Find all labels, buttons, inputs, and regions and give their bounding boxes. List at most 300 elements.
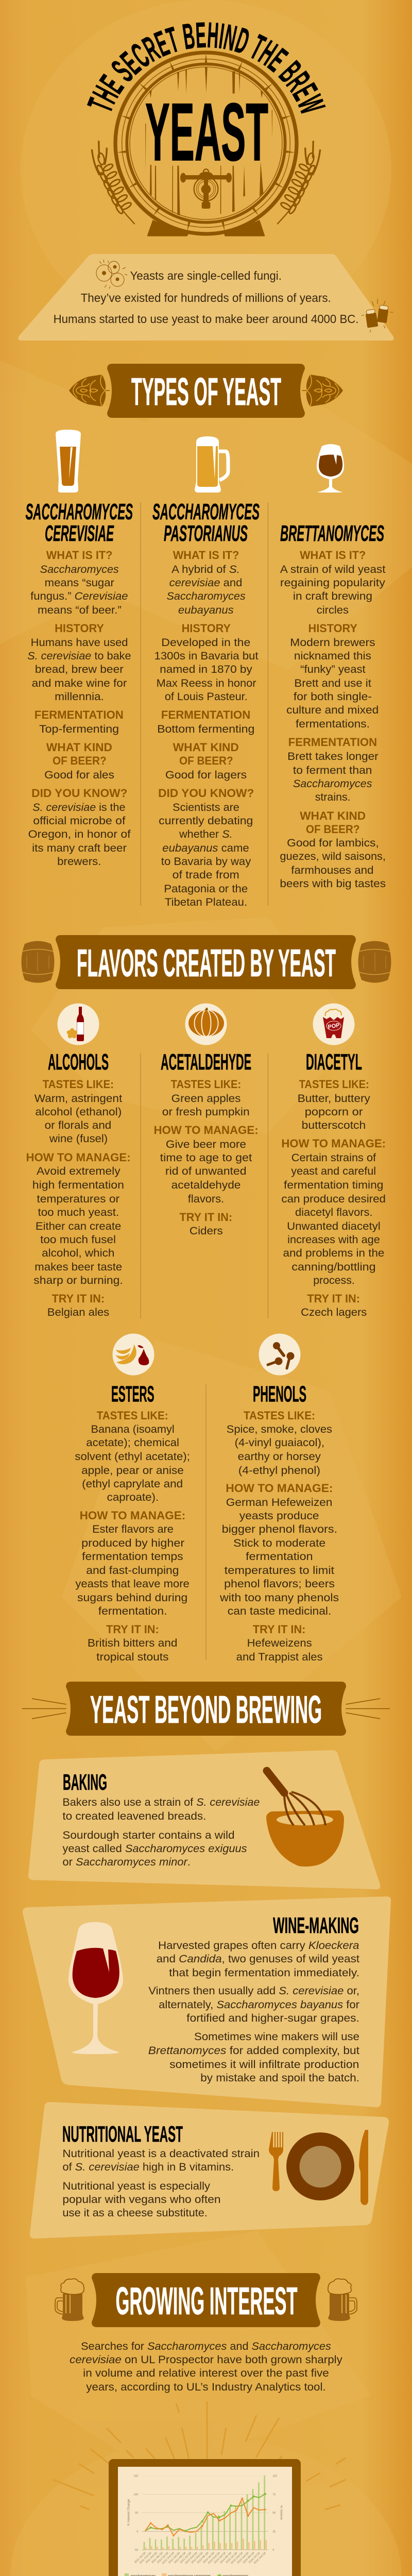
- chart: percent interest change and volume: 2015 3rd Qtr: [236, 2551, 250, 2565]
- text block: fermentation: FERMENTATION: [35, 708, 124, 721]
- text block: try it in: Belgian ales: [47, 1306, 109, 1318]
- icon: barrel with tap and wheat: [92, 53, 320, 236]
- text block: try it in: [179, 1211, 232, 1237]
- icon: wine bottle and flower: [58, 1004, 99, 1045]
- text block: what kind of beer: OF BEER?: [53, 754, 107, 767]
- icon: banana and pear: [112, 1333, 154, 1376]
- text block: history: bread, brew beer: [35, 663, 124, 675]
- text block: what is it: WHAT IS IT?: [46, 549, 112, 562]
- text block: history: Max Reess in honor: [157, 677, 256, 689]
- chart: percent interest change and volume: 2013 4th Qtr: [197, 2551, 210, 2564]
- column: saccharomyces pastorianus: [152, 499, 260, 908]
- text block: how to manage: fermentation temps: [82, 1550, 183, 1563]
- icon: left beer mug: [55, 2279, 84, 2321]
- text block: how to manage: and fast-clumping: [86, 1564, 179, 1577]
- text block: history: [27, 622, 131, 703]
- text block: nutritional yeast: popular with vegans who often: [62, 2193, 221, 2206]
- text block: history: HISTORY: [55, 622, 104, 635]
- text block: wine-making: by mistake and spoil the batch.: [200, 2072, 359, 2084]
- icon: right hop: [302, 375, 343, 406]
- text block: did you know: DID YOU KNOW?: [158, 787, 254, 800]
- text block: intro facts: Humans started to use yeast to make beer around 4000 BC.: [54, 312, 359, 326]
- text block: fermentation: Saccharomyces: [293, 777, 372, 790]
- text block: what is it: regaining popularity: [280, 577, 385, 589]
- column: saccharomyces cerevisiae: [26, 499, 133, 868]
- chart: percent interest change and volume: 50: [272, 2512, 276, 2515]
- icon: plate fork and knife: [269, 2130, 368, 2205]
- text block: intro facts: They’ve existed for hundreds of millions of years.: [81, 291, 331, 304]
- text block: history: fermentations.: [296, 718, 370, 730]
- text block: how to manage: [153, 1124, 259, 1205]
- text block: history: named in 1870 by: [160, 663, 252, 675]
- text block: what is it: [30, 549, 128, 616]
- text block: how to manage: [26, 1151, 131, 1286]
- text block: what is it: [167, 549, 246, 616]
- text block: tastes like: alcohol (ethanol): [35, 1106, 122, 1118]
- text block: tastes like: apple, pear or anise: [81, 1464, 184, 1477]
- text block: history: HISTORY: [308, 622, 357, 635]
- text block: history: 1300s in Bavaria but: [154, 650, 259, 662]
- chart: percent interest change and volume: 25: [272, 2530, 276, 2533]
- chart: percent interest change and volume: [125, 2475, 288, 2576]
- text block: tastes like: wine (fusel): [49, 1132, 108, 1145]
- text block: try it in: tropical stouts: [96, 1651, 169, 1663]
- heading: SACCHAROMYCES: [152, 499, 260, 524]
- text block: how to manage: German Hefeweizen: [226, 1496, 332, 1509]
- chart: percent interest change and volume: 2012 1st Qtr: [157, 2551, 169, 2564]
- text block: how to manage: rid of unwanted: [165, 1165, 247, 1177]
- text block: how to manage: bigger phenol flavors.: [222, 1523, 337, 1535]
- text block: did you know: Tibetan Plateau.: [165, 896, 247, 908]
- text block: wine-making: [148, 1939, 359, 2084]
- chart: percent interest change and volume: 2014 1st Qtr: [202, 2551, 215, 2564]
- text block: growing interest: Searches for Saccharomyces and Saccharomyces: [81, 2340, 331, 2352]
- text block: try it in: British bitters and: [88, 1637, 177, 1649]
- text block: try it in: and Trappist ales: [236, 1651, 323, 1663]
- text block: try it in: Czech lagers: [301, 1306, 367, 1318]
- text block: did you know: [158, 787, 254, 908]
- text block: fermentation: Top-fermenting: [39, 723, 119, 735]
- chart: percent interest change and volume: 50: [135, 2512, 138, 2515]
- text block: wine-making: that begin fermentation immediately.: [169, 1967, 359, 1979]
- heading: nutritional yeast: NUTRITIONAL YEAST: [62, 2122, 183, 2147]
- chart: percent interest change and volume: 100: [133, 2493, 138, 2496]
- text block: tastes like: TASTES LIKE:: [43, 1078, 114, 1091]
- text block: what kind of beer: farmhouses and: [291, 864, 374, 876]
- text block: what kind of beer: [44, 741, 114, 781]
- text block: how to manage: yeasts that leave more: [75, 1578, 190, 1590]
- text block: what kind of beer: beers with big tastes: [280, 877, 386, 890]
- text block: history: Modern brewers: [290, 636, 375, 649]
- text block: history: culture and mixed: [286, 704, 379, 716]
- column: alcohols: [26, 1049, 131, 1318]
- icon: left wheat: [92, 141, 135, 224]
- text block: how to manage: temperatures or: [37, 1193, 119, 1205]
- text block: how to manage: alcohol, which: [42, 1247, 114, 1259]
- text block: how to manage: [281, 1137, 386, 1286]
- text block: tastes like: (4-ethyl phenol): [238, 1464, 320, 1477]
- text block: what is it: [280, 549, 386, 616]
- text block: history: S. cerevisiae to bake: [27, 650, 131, 662]
- chart: percent interest change and volume: 2012 3rd Qtr: [168, 2551, 181, 2565]
- chart: percent interest change and volume: 2011 3rd Qtr: [145, 2551, 158, 2564]
- icon: cloves: [259, 1333, 301, 1376]
- text block: how to manage: yeast and careful: [291, 1165, 376, 1177]
- text block: tastes like: Banana (isoamyl: [91, 1423, 175, 1435]
- text block: what kind of beer: WHAT KIND: [173, 741, 239, 754]
- text block: how to manage: [219, 1482, 339, 1617]
- text block: what is it: eubayanus: [178, 604, 234, 616]
- text block: tastes like: [35, 1078, 122, 1145]
- text block: tastes like: earthy or horsey: [238, 1450, 321, 1463]
- text block: how to manage: flavors.: [188, 1193, 224, 1205]
- text block: history: “funky” yeast: [300, 663, 366, 675]
- icon: wine glass: [68, 1922, 123, 2054]
- text block: how to manage: [75, 1509, 190, 1617]
- text block: how to manage: HOW TO MANAGE:: [226, 1482, 333, 1495]
- text block: tastes like: (4-vinyl guaiacol),: [235, 1436, 324, 1449]
- chart: percent interest change and volume: % Volume: [279, 2505, 283, 2520]
- text block: history: Brett and use it: [294, 677, 371, 689]
- text block: try it in: [236, 1623, 323, 1663]
- text block: what is it: cerevisiae and: [169, 577, 242, 589]
- text block: how to manage: Certain strains of: [291, 1151, 376, 1164]
- text block: how to manage: high fermentation: [32, 1179, 124, 1191]
- text block: baking: or Saccharomyces minor.: [62, 1856, 191, 1868]
- text block: how to manage: diacetyl flavors.: [295, 1206, 373, 1218]
- text block: what kind of beer: OF BEER?: [306, 823, 359, 836]
- text block: how to manage: fermentation: [246, 1550, 313, 1563]
- text block: wine-making: Vintners then usually add S. cerevisiae or,: [148, 1985, 359, 1997]
- text block: what kind of beer: WHAT KIND: [46, 741, 112, 754]
- text block: nutritional yeast: of S. cerevisiae high in B vitamins.: [62, 2161, 234, 2173]
- text block: tastes like: [227, 1409, 332, 1477]
- heading: CEREVISIAE: [45, 521, 114, 546]
- text block: nutritional yeast: Nutritional yeast is a deactivated strain: [62, 2147, 260, 2160]
- text block: tastes like: butterscotch: [302, 1119, 366, 1131]
- header: barrel title graphic: YEAST: [145, 86, 268, 178]
- text block: tastes like: or florals and: [45, 1119, 111, 1131]
- chart: percent interest change and volume: 2015 2nd Qtr: [230, 2551, 244, 2565]
- icon: yeast cells: [96, 260, 127, 289]
- text block: did you know: whether S.: [179, 828, 233, 840]
- text block: how to manage: makes beer taste: [35, 1261, 122, 1273]
- text block: did you know: brewers.: [57, 855, 101, 868]
- section: types of yeast: [26, 364, 386, 908]
- text block: tastes like: acetate); chemical: [86, 1436, 179, 1449]
- chart: percent interest change and volume: % Interest Change: [127, 2499, 131, 2526]
- text block: nutritional yeast: Nutritional yeast is especially: [62, 2180, 210, 2192]
- banner: types of yeast: [107, 364, 305, 418]
- text block: tastes like: (ethyl caprylate and: [82, 1478, 183, 1490]
- text block: did you know: to Bavaria by way: [161, 855, 251, 868]
- section: growing interest: [53, 2273, 357, 2576]
- text block: baking: to created leavened breads.: [62, 1810, 206, 1822]
- text block: how to manage: canning/bottling: [291, 1261, 376, 1273]
- icon: left barrel: [22, 941, 55, 983]
- text block: how to manage: HOW TO MANAGE:: [153, 1124, 259, 1137]
- text block: how to manage: yeasts produce: [239, 1510, 319, 1522]
- text block: tastes like: TASTES LIKE:: [97, 1409, 168, 1422]
- text block: how to manage: acetaldehyde: [171, 1179, 241, 1191]
- header: barrel title graphic: [87, 22, 326, 236]
- text block: what is it: means “sugar: [45, 577, 114, 589]
- text block: tastes like: Spice, smoke, cloves: [227, 1423, 332, 1435]
- text block: tastes like: [298, 1078, 370, 1131]
- chart: percent interest change and volume: 0: [272, 2549, 274, 2552]
- text block: how to manage: phenol flavors; beers: [224, 1578, 335, 1590]
- text block: how to manage: can produce desired: [281, 1193, 386, 1205]
- banner: yeast beyond brewing: [22, 1682, 390, 1736]
- text block: try it in: TRY IT IN:: [106, 1623, 159, 1636]
- column: diacetyl: [281, 1049, 386, 1318]
- icon: left hop: [69, 375, 110, 406]
- text block: how to manage: Either can create: [36, 1220, 121, 1232]
- text block: intro facts: Yeasts are single-celled fungi.: [130, 269, 282, 282]
- text block: tastes like: popcorn or: [305, 1106, 363, 1118]
- text block: how to manage: temperatures to limit: [225, 1564, 334, 1577]
- text block: tastes like: solvent (ethyl acetate);: [75, 1450, 190, 1463]
- icon: right barrel: [358, 941, 391, 983]
- text block: how to manage: sharp or burning.: [33, 1274, 123, 1286]
- text block: what is it: fungus.” Cerevisiae: [30, 590, 128, 602]
- title: the secret behind the brew: THE SECRET BEHIND THE BREW: [87, 22, 326, 114]
- chart: percent interest change and volume: 2013 3rd Qtr: [191, 2551, 204, 2565]
- chart: percent interest change and volume: 100: [272, 2475, 277, 2478]
- text block: history: [154, 622, 259, 703]
- chart: percent interest change and volume: 2011 2nd Qtr: [139, 2551, 152, 2565]
- chart: percent interest change and volume: 2013 2nd Qtr: [185, 2551, 198, 2565]
- heading: PASTORIANUS: [164, 521, 248, 546]
- text block: how to manage: with too many phenols: [219, 1591, 339, 1604]
- chart: percent interest change and volume: 2012 2nd Qtr: [162, 2551, 175, 2565]
- heading: SACCHAROMYCES: [26, 499, 133, 524]
- text block: history: and make wine for: [32, 677, 127, 689]
- text block: did you know: official microbe of: [33, 815, 125, 827]
- text block: did you know: Patagonia or the: [164, 883, 248, 895]
- chart: percent interest change and volume: 2014 4th Qtr: [219, 2551, 233, 2564]
- text block: how to manage: produced by higher: [81, 1537, 184, 1549]
- chart: percent interest change and volume: 2014 3rd Qtr: [214, 2551, 227, 2565]
- text block: what kind of beer: guezes, wild saisons,: [280, 850, 386, 862]
- chart: percent interest change and volume: 2011 4th Qtr: [151, 2551, 164, 2564]
- column: brettanomyces: [280, 521, 386, 890]
- chart: percent interest change and volume: 150: [133, 2475, 138, 2478]
- text block: fermentation: to ferment than: [293, 764, 372, 776]
- text block: what is it: A hybrid of S.: [171, 563, 240, 575]
- text block: nutritional yeast: use it as a cheese substitute.: [62, 2207, 208, 2219]
- chart: percent interest change and volume: 2015 1st Qtr: [225, 2551, 238, 2564]
- text block: try it in: [301, 1292, 367, 1318]
- text block: how to manage: HOW TO MANAGE:: [281, 1137, 386, 1150]
- text block: how to manage: can taste medicinal.: [228, 1605, 331, 1617]
- text block: what is it: Saccharomyces: [167, 590, 246, 602]
- column: phenols: [219, 1382, 339, 1663]
- text block: how to manage: HOW TO MANAGE:: [80, 1509, 185, 1522]
- text block: growing interest: [70, 2340, 342, 2393]
- text block: baking: Sourdough starter contains a wild: [62, 1829, 235, 1841]
- text block: how to manage: Ester flavors are: [92, 1523, 174, 1535]
- icon: pint glass: [56, 430, 81, 493]
- text block: try it in: [88, 1623, 177, 1663]
- legend: [125, 2573, 288, 2576]
- text block: wine-making: sometimes it will infiltrate production: [169, 2058, 359, 2071]
- text block: how to manage: HOW TO MANAGE:: [26, 1151, 131, 1164]
- column: acetaldehyde: ACETALDEHYDE: [161, 1049, 251, 1075]
- text block: history: Humans have used: [31, 636, 128, 649]
- text block: tastes like: [162, 1078, 250, 1118]
- icon: popcorn: POP: [328, 1022, 340, 1030]
- text block: fermentation: FERMENTATION: [288, 736, 377, 749]
- text block: try it in: TRY IT IN:: [307, 1292, 360, 1305]
- text block: how to manage: Stick to moderate: [233, 1537, 325, 1549]
- banner: flavors created by yeast: [56, 935, 356, 989]
- chart: percent interest change and volume: 2016 2nd Qtr: [253, 2551, 267, 2565]
- chart: percent interest change and volume: -50: [134, 2549, 138, 2552]
- text block: how to manage: fermentation timing: [284, 1179, 383, 1191]
- text block: did you know: [28, 787, 131, 868]
- icon: pumpkin: [185, 1004, 227, 1045]
- text block: history: HISTORY: [182, 622, 231, 635]
- text block: how to manage: Give beer more: [166, 1138, 246, 1150]
- text block: fermentation: [157, 708, 254, 735]
- text block: what is it: in craft brewing: [293, 590, 372, 602]
- icon: popcorn: [313, 1004, 354, 1045]
- text block: try it in: TRY IT IN:: [253, 1623, 305, 1636]
- chart: percent interest change and volume: 2012 4th Qtr: [174, 2551, 187, 2564]
- text block: tastes like: Butter, buttery: [298, 1092, 370, 1105]
- text block: wine-making: alternately, Saccharomyces bayanus for: [159, 1998, 359, 2011]
- text block: wine-making: Sometimes wine makers will use: [194, 2030, 359, 2043]
- text block: did you know: eubayanus came: [162, 842, 249, 854]
- text block: tastes like: Green apples: [171, 1092, 241, 1105]
- text block: try it in: Hefeweizens: [247, 1637, 312, 1649]
- text block: what kind of beer: [280, 809, 386, 890]
- text block: history: millennia.: [55, 690, 104, 703]
- text block: try it in: TRY IT IN:: [52, 1292, 105, 1305]
- text block: fermentation: [35, 708, 124, 735]
- panel: baking: BAKING: [63, 1770, 107, 1795]
- text block: what is it: A strain of wild yeast: [280, 563, 386, 575]
- icon: whisk in mixing bowl: [266, 1771, 344, 1867]
- text block: nutritional yeast: [62, 2147, 260, 2219]
- icon: clinking beer mugs: [362, 299, 393, 332]
- text block: how to manage: increases with age: [287, 1233, 380, 1246]
- section: flavors created by yeast: [22, 935, 391, 1663]
- text block: growing interest: cerevisiae on UL Prospector have both grown sharply: [70, 2353, 342, 2366]
- column: esters: ESTERS: [111, 1382, 154, 1406]
- text block: baking: yeast called Saccharomyces exiguus: [62, 1842, 247, 1855]
- text block: tastes like: [75, 1409, 190, 1503]
- text block: how to manage: and problems in the: [283, 1247, 384, 1259]
- text block: fermentation: strains.: [315, 791, 351, 803]
- text block: fermentation: Brett takes longer: [287, 750, 379, 762]
- text block: intro facts: [54, 269, 359, 326]
- icon: beer mug: [195, 436, 228, 493]
- text block: wine-making: Harvested grapes often carry Kloeckera: [158, 1939, 359, 1952]
- text block: history: nicknamed this: [294, 650, 371, 662]
- icon: right beer mug: [328, 2279, 357, 2321]
- column: acetaldehyde: [153, 1049, 259, 1237]
- text block: how to manage: too much yeast.: [38, 1206, 119, 1218]
- text block: tastes like: TASTES LIKE:: [171, 1078, 241, 1091]
- text block: how to manage: sugars behind during: [77, 1591, 187, 1604]
- text block: history: of Louis Pasteur.: [165, 690, 248, 703]
- text block: did you know: DID YOU KNOW?: [31, 787, 127, 800]
- chart: percent interest change and volume: 2011 1st Qtr: [134, 2551, 147, 2564]
- chart: percent interest change and volume: 2014 2nd Qtr: [208, 2551, 221, 2565]
- text block: wine-making: Brettanomyces for added complexity, but: [148, 2044, 359, 2057]
- text block: fermentation: Bottom fermenting: [157, 723, 254, 735]
- column: phenols: PHENOLS: [253, 1382, 306, 1406]
- heading: [152, 499, 260, 546]
- text block: try it in: [47, 1292, 109, 1318]
- text block: try it in: Ciders: [190, 1225, 223, 1237]
- text block: did you know: of trade from: [173, 869, 239, 881]
- text block: did you know: its many craft beer: [32, 842, 127, 854]
- text block: what is it: WHAT IS IT?: [300, 549, 366, 562]
- text block: how to manage: too much fusel: [40, 1233, 116, 1246]
- text block: history: Developed in the: [161, 636, 250, 649]
- text block: tastes like: Warm, astringent: [35, 1092, 122, 1105]
- text block: what is it: WHAT IS IT?: [173, 549, 239, 562]
- text block: fermentation: FERMENTATION: [161, 708, 250, 721]
- column: esters: [75, 1382, 190, 1663]
- text block: did you know: Scientists are: [173, 801, 239, 814]
- icon: laptop with chart: [90, 2459, 319, 2576]
- text block: how to manage: process.: [313, 1274, 355, 1286]
- text block: how to manage: fermentation.: [98, 1605, 167, 1617]
- text block: wine-making: fortified and higher-sugar grapes.: [186, 2012, 359, 2024]
- text block: what is it: means “of beer.”: [38, 604, 122, 616]
- text block: what kind of beer: Good for lambics,: [287, 837, 379, 849]
- text block: did you know: currently debating: [159, 815, 253, 827]
- chart: percent interest change and volume: 2016 1st Qtr: [248, 2551, 261, 2564]
- panel: baking: [28, 1750, 380, 1889]
- text block: history: [286, 622, 379, 730]
- text block: tastes like: TASTES LIKE:: [299, 1078, 369, 1091]
- chart: percent interest change and volume: 2015 4th Qtr: [243, 2551, 255, 2564]
- text block: what kind of beer: Good for ales: [44, 769, 114, 781]
- text block: wine-making: and Candida, two genuses of wild yeast: [157, 1953, 359, 1965]
- chart: percent interest change and volume: 75: [272, 2493, 276, 2496]
- heading: [26, 499, 133, 546]
- text block: did you know: S. cerevisiae is the: [32, 801, 125, 814]
- icon: tulip glass: [317, 444, 344, 493]
- text block: what kind of beer: [165, 741, 247, 781]
- panel: yeast intro facts: [18, 254, 394, 341]
- title: the secret behind the brew: [87, 22, 326, 114]
- text block: how to manage: time to age to get: [160, 1151, 252, 1164]
- text block: what kind of beer: Good for lagers: [165, 769, 247, 781]
- text block: how to manage: Unwanted diacetyl: [287, 1220, 381, 1232]
- text block: did you know: Oregon, in honor of: [28, 828, 131, 840]
- panel: nutritional yeast: [30, 2102, 389, 2239]
- text block: how to manage: Avoid extremely: [37, 1165, 121, 1177]
- text block: history: for both single-: [294, 690, 372, 703]
- panel: wine-making: [23, 1896, 391, 2107]
- text block: tastes like: TASTES LIKE:: [244, 1409, 315, 1422]
- text block: baking: [62, 1796, 260, 1868]
- text block: baking: Bakers also use a strain of S. cerevisiae: [62, 1796, 260, 1808]
- text block: tastes like: or fresh pumpkin: [162, 1106, 250, 1118]
- text block: what kind of beer: WHAT KIND: [300, 809, 366, 822]
- text block: try it in: TRY IT IN:: [179, 1211, 232, 1224]
- chart: percent interest change and volume: 2013 1st Qtr: [179, 2551, 193, 2564]
- text block: what is it: Saccharomyces: [40, 563, 119, 575]
- text block: growing interest: in volume and relative interest over the past five: [83, 2367, 329, 2379]
- text block: what kind of beer: OF BEER?: [179, 754, 233, 767]
